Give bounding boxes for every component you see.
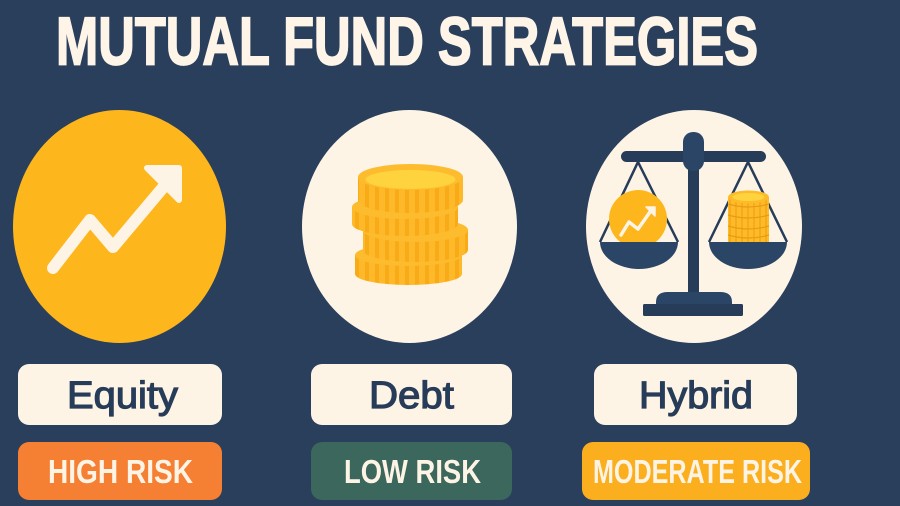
left pan: [600, 242, 678, 269]
growth coin: [609, 190, 667, 242]
equity label: [18, 364, 222, 425]
moderate risk badge: [582, 442, 810, 500]
icon: coin stack: [352, 164, 468, 285]
hybrid label: [594, 364, 797, 425]
debt label: [311, 364, 512, 425]
base plate: [643, 304, 743, 316]
high risk badge: HIGH RISK: [48, 453, 193, 490]
bottom coin: [355, 244, 462, 285]
pivot: [683, 132, 704, 171]
icon: balance scale: [600, 132, 787, 316]
debt circle: [302, 110, 517, 343]
low risk badge: [311, 442, 512, 500]
equity circle: [13, 110, 226, 343]
gold coin stack: [728, 190, 769, 242]
debt label: Debt: [369, 375, 454, 417]
equity label: Equity: [67, 375, 178, 417]
panel: hybrid: [582, 110, 810, 500]
icon: rising arrow: [53, 168, 179, 268]
right strings: [709, 162, 787, 242]
panel: equity: [13, 110, 226, 500]
panel: debt: [302, 110, 517, 500]
post: [688, 165, 699, 294]
hybrid label: Hybrid: [639, 375, 753, 417]
high risk badge: [18, 442, 222, 500]
second coin: [352, 195, 458, 236]
low risk badge: LOW RISK: [344, 453, 481, 490]
moderate risk badge: MODERATE RISK: [593, 453, 802, 490]
beam: [621, 151, 766, 162]
top coin: [358, 164, 463, 213]
right pan: [709, 242, 787, 269]
hybrid circle: [586, 110, 802, 343]
third coin: [363, 218, 468, 262]
base: [656, 292, 732, 305]
left strings: [600, 162, 678, 242]
